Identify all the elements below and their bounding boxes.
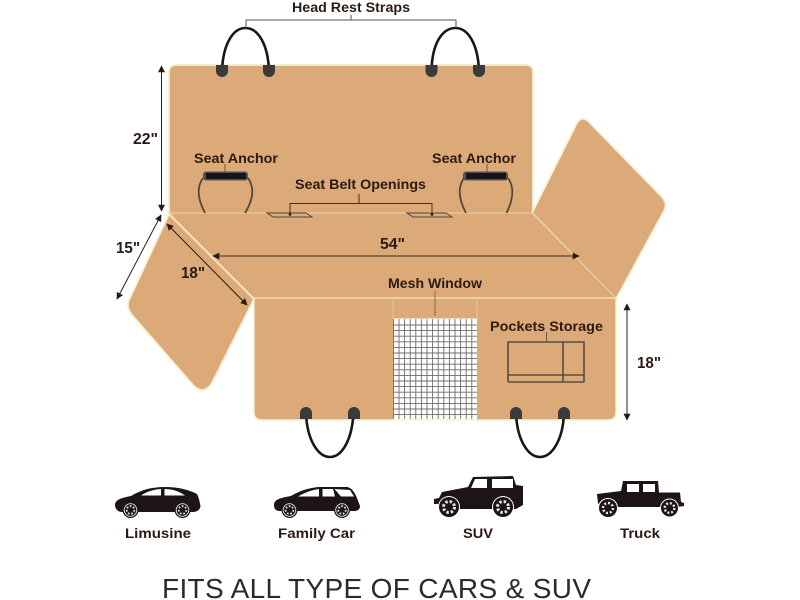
icon: limousine: [115, 487, 200, 518]
seat belt openings label: Seat Belt Openings: [295, 177, 426, 192]
mesh window leader: [434, 291, 436, 316]
dimension 18 inch front: 18": [637, 355, 661, 372]
seat belt openings: [267, 194, 452, 217]
panel: back rest: [169, 65, 533, 214]
dimension 54 inch: 54": [380, 236, 405, 253]
dimension 15 inch: 15": [116, 240, 140, 257]
pockets storage: [508, 332, 584, 382]
icon: suv: [434, 476, 523, 518]
suv label: SUV: [463, 526, 493, 541]
panel: seat base: [169, 213, 616, 298]
dimension arrow 18 inch front: [626, 304, 628, 420]
dimension 18 inch flap: 18": [181, 265, 205, 282]
truck label: Truck: [620, 526, 661, 541]
seat anchor label left: Seat Anchor: [194, 151, 279, 166]
family car label: Family Car: [278, 526, 356, 541]
head rest strap right: [426, 28, 485, 77]
pockets storage label: Pockets Storage: [490, 319, 604, 334]
mesh window: [393, 298, 477, 420]
seat anchor left: [199, 164, 252, 213]
head rest straps bracket: [246, 15, 456, 28]
head rest straps label: Head Rest Straps: [292, 0, 410, 15]
head rest strap left: [216, 28, 275, 77]
panel: right side flap: [532, 119, 666, 299]
dimension arrow 54 inch: [213, 255, 579, 257]
limousine label: Limusine: [125, 526, 192, 541]
mesh window label: Mesh Window: [388, 276, 483, 291]
icon: truck: [597, 481, 684, 518]
panel: left side flap: [128, 214, 254, 390]
seat anchor label right: Seat Anchor: [432, 151, 517, 166]
dimension arrow 22 inch: [160, 66, 162, 211]
seat anchor right: [460, 164, 512, 213]
panel: seat cover: [128, 65, 666, 420]
dimension 22 inch: 22": [133, 131, 158, 148]
dimension arrow 18 inch flap: [167, 224, 247, 305]
dimension arrow 15 inch: [117, 215, 161, 299]
icon: family car: [274, 487, 360, 518]
front strap right: [510, 407, 570, 457]
panel: front drop: [254, 298, 616, 420]
front strap left: [300, 407, 360, 457]
